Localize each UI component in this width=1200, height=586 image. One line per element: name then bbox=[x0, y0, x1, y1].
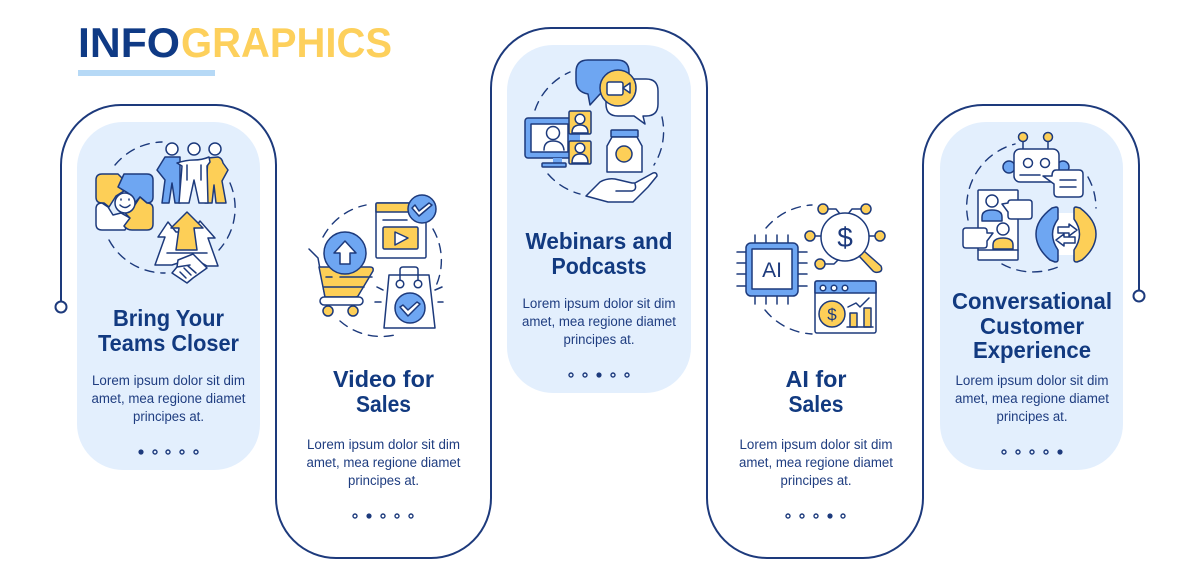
icon: ai chip and analytics: $ bbox=[837, 222, 853, 253]
heading: Video for bbox=[333, 366, 434, 392]
text block: Lorem ipsum dolor sit dim bbox=[740, 437, 892, 452]
pagination dots bbox=[353, 513, 413, 519]
text block bbox=[955, 373, 1109, 424]
text block: amet, mea regione diamet bbox=[306, 455, 461, 470]
heading: AI for bbox=[786, 366, 847, 392]
text block: principes at. bbox=[564, 332, 634, 347]
text block: amet, mea regione diamet bbox=[92, 391, 246, 406]
text block bbox=[522, 296, 676, 347]
icon: ai chip and analytics bbox=[737, 204, 885, 334]
text block: amet, mea regione diamet bbox=[955, 391, 1109, 406]
text block: principes at. bbox=[133, 409, 204, 424]
heading: Sales bbox=[356, 391, 411, 417]
title: INFO bbox=[78, 19, 180, 66]
pagination dots bbox=[569, 372, 629, 378]
heading: Experience bbox=[973, 337, 1091, 363]
icon: chatbot, chat and phones bbox=[963, 132, 1096, 272]
panel: video for sales bbox=[306, 195, 461, 519]
pagination dots bbox=[786, 513, 845, 519]
heading bbox=[98, 305, 239, 356]
text block: Lorem ipsum dolor sit dim bbox=[522, 296, 676, 311]
text block: amet, mea regione diamet bbox=[739, 455, 893, 470]
heading: Bring Your bbox=[113, 305, 224, 331]
title: GRAPHICS bbox=[181, 19, 392, 66]
heading: Webinars and bbox=[526, 228, 672, 254]
panel: bring your teams closer bbox=[77, 122, 260, 470]
heading bbox=[786, 366, 847, 417]
heading bbox=[526, 228, 672, 279]
heading: Conversational bbox=[952, 288, 1112, 314]
heading: Teams Closer bbox=[98, 330, 239, 356]
panel: webinars and podcasts bbox=[507, 45, 691, 393]
heading bbox=[333, 366, 434, 417]
text block bbox=[739, 437, 893, 488]
text block bbox=[92, 373, 246, 424]
text block: principes at. bbox=[348, 473, 419, 488]
text block: amet, mea regione diamet bbox=[522, 314, 676, 329]
text block: principes at. bbox=[996, 409, 1068, 424]
text block: Lorem ipsum dolor sit dim bbox=[307, 437, 460, 452]
pagination dots bbox=[138, 449, 198, 455]
text block: Lorem ipsum dolor sit dim bbox=[92, 373, 245, 388]
icon: team and handshake bbox=[96, 142, 235, 283]
heading: Sales bbox=[788, 391, 844, 417]
panel: ai for sales bbox=[737, 204, 893, 519]
icon: cart, video and bag bbox=[309, 195, 443, 336]
pagination dots bbox=[1002, 449, 1063, 455]
text block: Lorem ipsum dolor sit dim bbox=[956, 373, 1108, 388]
title bbox=[78, 19, 392, 76]
heading: Podcasts bbox=[552, 253, 646, 279]
icon: webinar and podcast bbox=[525, 60, 664, 202]
heading: Customer bbox=[980, 313, 1084, 339]
text block: principes at. bbox=[780, 473, 852, 488]
panel: conversational customer experience bbox=[940, 122, 1123, 470]
icon: ai chip and analytics: $ bbox=[827, 305, 837, 324]
text block bbox=[306, 437, 461, 488]
heading bbox=[952, 288, 1112, 363]
icon: ai chip and analytics: AI bbox=[762, 259, 782, 282]
